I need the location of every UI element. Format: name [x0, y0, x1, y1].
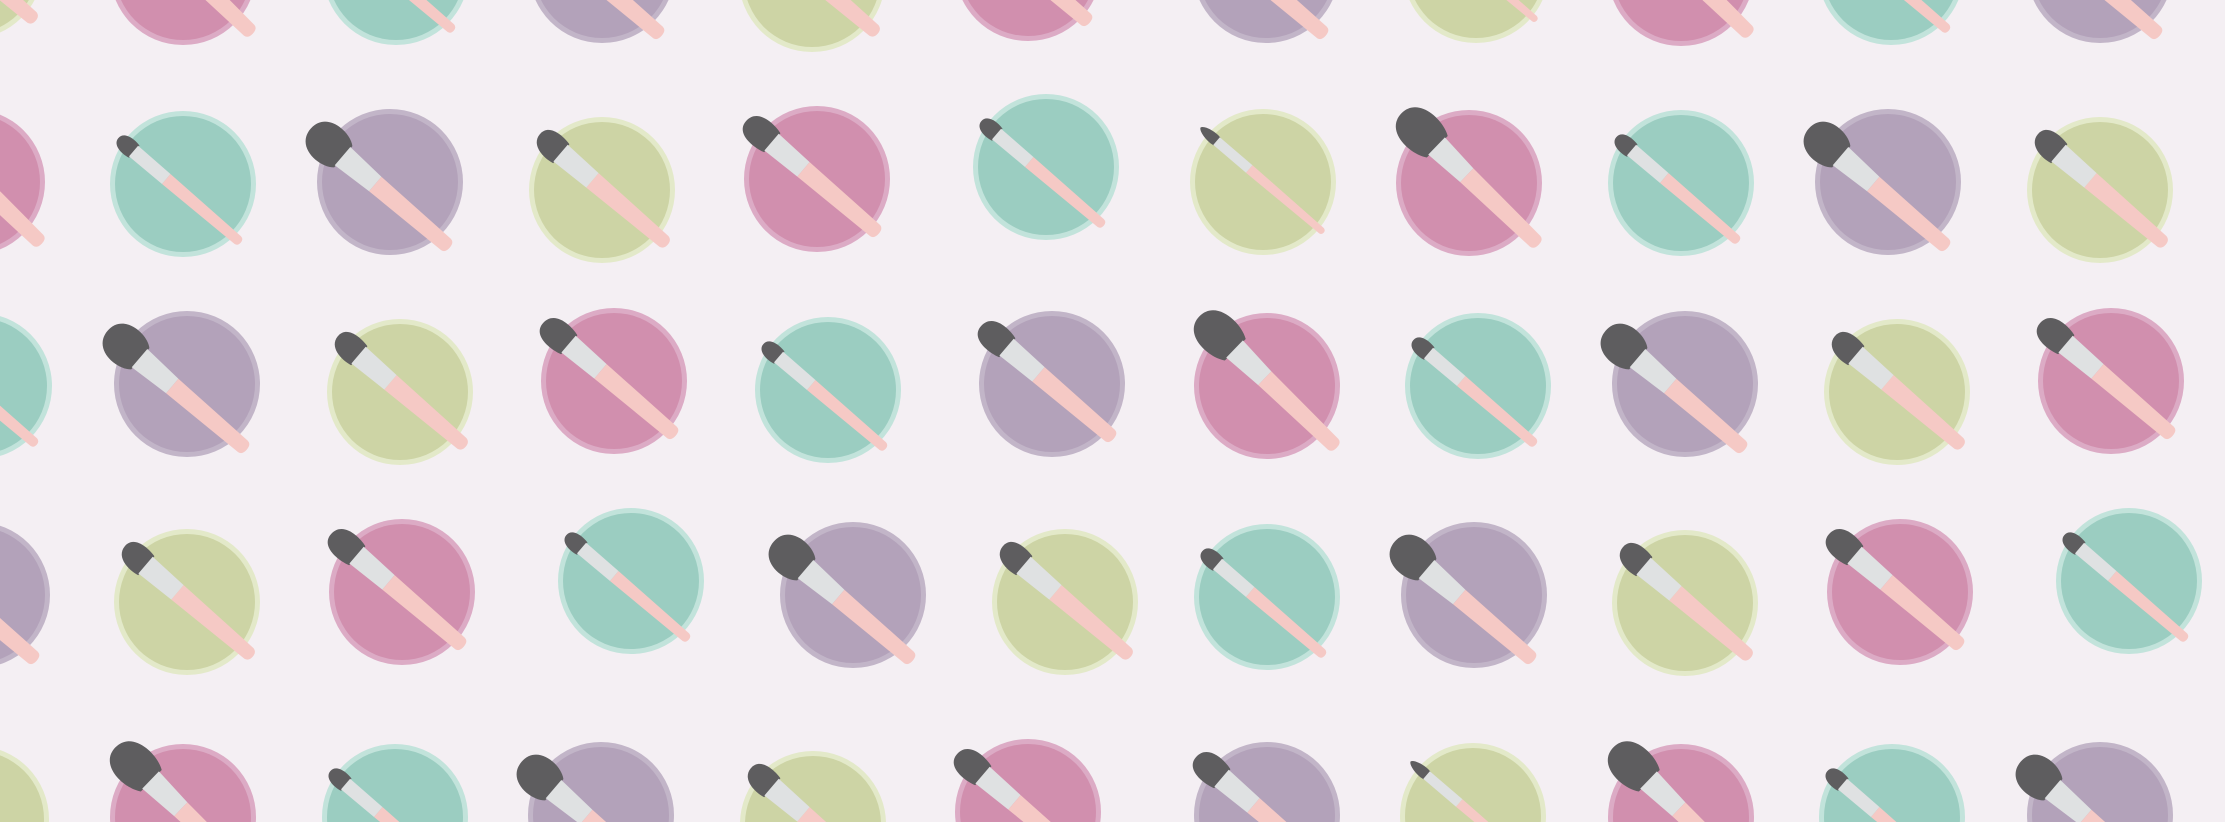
row 2 brush 2: teal disc: [110, 111, 256, 257]
row 3 brush 4: pink disc: [534, 308, 687, 454]
row 1 brush 2: pink disc: [101, 0, 267, 49]
row 3 brush 11: pink disc: [2031, 308, 2184, 454]
row 1 brush 5: green disc: [739, 0, 887, 52]
row 5 brush 1: green disc: [0, 746, 51, 822]
row 5 brush 10: teal disc: [1819, 744, 1965, 822]
row 1 brush 10: teal disc: [1818, 0, 1964, 45]
row 5 brush 8: green disc: [1400, 743, 1546, 822]
row 3 brush 9: purple disc: [1592, 311, 1758, 465]
row 4 brush 3: pink disc: [322, 519, 475, 665]
row 4 brush 2: green disc: [114, 529, 262, 675]
row 4 brush 11: teal disc: [2056, 508, 2202, 654]
row 3 brush 2: purple disc: [94, 311, 260, 465]
row 2 brush 6: teal disc: [973, 94, 1119, 240]
row 4 brush 7: teal disc: [1194, 524, 1340, 670]
row 2 brush 11: green disc: [2027, 117, 2175, 263]
row 5 brush 11: purple disc: [2007, 742, 2173, 822]
row 2 brush 9: teal disc: [1608, 110, 1754, 256]
row 5 brush 9: pink disc: [1599, 732, 1765, 822]
row 3 brush 1: teal disc: [0, 313, 52, 459]
row 3 brush 10: green disc: [1824, 319, 1972, 465]
row 3 brush 8: teal disc: [1405, 313, 1551, 459]
row 4 brush 8: purple disc: [1381, 522, 1547, 676]
row 5 brush 7: purple disc: [1187, 742, 1340, 822]
row 2 brush 3: purple disc: [297, 109, 463, 263]
row 2 brush 4: green disc: [529, 117, 677, 263]
row 1 brush 4: purple disc: [509, 0, 675, 51]
row 3 brush 7: pink disc: [1185, 301, 1351, 463]
row 1 brush 6: pink disc: [948, 0, 1101, 41]
row 4 brush 9: green disc: [1612, 530, 1760, 676]
row 1 brush 11: purple disc: [2007, 0, 2173, 51]
row 5 brush 2: pink disc: [101, 732, 267, 822]
row 5 brush 5: green disc: [740, 751, 888, 822]
row 4 brush 5: purple disc: [760, 522, 926, 676]
row 4 brush 10: pink disc: [1820, 519, 1973, 665]
row 1 brush 8: green disc: [1403, 0, 1549, 43]
row 2 brush 1: pink disc: [0, 97, 56, 259]
row 5 brush 6: pink disc: [948, 739, 1101, 822]
row 2 brush 8: pink disc: [1387, 98, 1553, 260]
row 2 brush 5: pink disc: [737, 106, 890, 252]
row 4 brush 1: purple disc: [0, 522, 50, 676]
row 1 brush 1: green disc: [0, 0, 45, 39]
row 1 brush 9: pink disc: [1599, 0, 1765, 50]
row 5 brush 3: teal disc: [322, 744, 468, 822]
row 4 brush 4: teal disc: [558, 508, 704, 654]
row 3 brush 5: teal disc: [755, 317, 901, 463]
row 5 brush 4: purple disc: [508, 742, 674, 822]
row 1 brush 7: purple disc: [1173, 0, 1339, 51]
row 2 brush 7: green disc: [1190, 109, 1336, 255]
row 4 brush 6: green disc: [992, 529, 1140, 675]
row 3 brush 3: green disc: [327, 319, 475, 465]
row 1 brush 3: teal disc: [323, 0, 469, 45]
row 3 brush 6: purple disc: [972, 311, 1125, 457]
row 2 brush 10: purple disc: [1795, 109, 1961, 263]
